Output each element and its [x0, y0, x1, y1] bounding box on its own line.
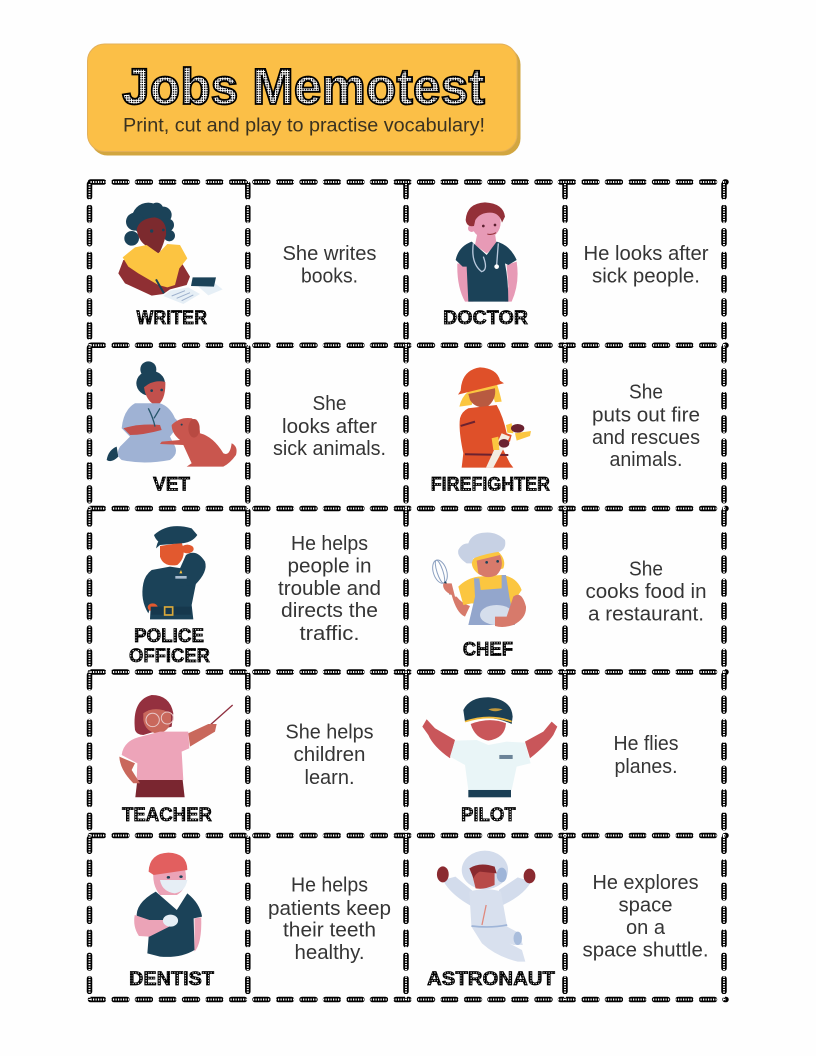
clue: dentist: healthy.: [294, 942, 364, 964]
clue: pilot: planes.: [614, 756, 678, 778]
clue: police officer: directs the: [281, 600, 378, 622]
clue: chef: a restaurant.: [588, 604, 704, 626]
clue: police officer: trouble and: [278, 578, 381, 600]
icon: dentist: [134, 853, 202, 957]
card: firefighter: [431, 367, 550, 496]
label: POLICE OFFICER: OFFICER: [129, 646, 210, 667]
label: CHEF: CHEF: [463, 640, 513, 661]
icon: firefighter: [458, 367, 531, 468]
clue: dentist: [268, 875, 391, 964]
clue: firefighter: [592, 382, 700, 471]
clue: astronaut: space shuttle.: [582, 940, 708, 962]
subtitle: Print, cut and play to practise vocabulary!: [123, 116, 485, 136]
dashed cut lines: [90, 182, 726, 1000]
clue: police officer: He helps: [291, 533, 368, 555]
card: teacher: [119, 695, 233, 826]
clue: pilot: [614, 733, 678, 778]
clue: writer: She writes: [282, 243, 376, 265]
icon: police officer: [142, 526, 206, 619]
card: astronaut: [427, 851, 555, 990]
clue: firefighter: animals.: [610, 449, 682, 471]
clue: teacher: She helps: [286, 722, 374, 744]
icon: chef: [430, 533, 526, 627]
clue: doctor: He looks after: [584, 243, 709, 265]
label: DENTIST: DENTIST: [129, 969, 214, 990]
card: vet: [107, 361, 237, 496]
clue: police officer: people in: [288, 556, 372, 578]
clue: writer: [282, 243, 376, 288]
clue: dentist: He helps: [291, 875, 368, 897]
label: DOCTOR: DOCTOR: [443, 308, 528, 329]
clue: dentist: patients keep: [268, 898, 391, 920]
label: POLICE OFFICER: [129, 626, 210, 667]
label: FIREFIGHTER: FIREFIGHTER: [431, 475, 550, 496]
title: Jobs Memotest: [122, 58, 485, 115]
clue: astronaut: He explores: [592, 872, 698, 894]
icon: writer: [118, 203, 223, 304]
title banner: [88, 44, 520, 156]
clue: vet: sick animals.: [273, 438, 386, 460]
clue: teacher: learn.: [304, 767, 354, 789]
icon: vet: [107, 361, 237, 467]
label: ASTRONAUT: ASTRONAUT: [427, 969, 555, 990]
clue: teacher: [286, 722, 374, 789]
clue: police officer: traffic.: [300, 623, 360, 645]
label: VET: VET: [153, 475, 190, 496]
clue: pilot: He flies: [614, 733, 678, 755]
card: doctor: [443, 202, 528, 329]
clue: doctor: [584, 243, 709, 288]
icon: teacher: [119, 695, 233, 797]
clue: writer: books.: [301, 266, 358, 288]
clue: chef: cooks food in: [586, 581, 706, 603]
icon: doctor: [456, 202, 518, 302]
clue: astronaut: [582, 872, 708, 962]
label: POLICE OFFICER: POLICE: [134, 626, 204, 647]
clue: astronaut: space: [618, 895, 672, 917]
clue: firefighter: She: [629, 382, 663, 404]
card: pilot: [422, 697, 557, 826]
card: writer: [118, 203, 223, 329]
clue: vet: looks after: [282, 416, 377, 438]
clue: police officer: [278, 533, 381, 645]
card: dentist: [129, 853, 214, 990]
banner face: [88, 44, 517, 152]
card: police officer: [129, 526, 210, 667]
clue: dentist: their teeth: [283, 920, 376, 942]
clue: vet: [273, 393, 386, 460]
clue: doctor: sick people.: [592, 266, 700, 288]
clue: chef: [586, 559, 706, 626]
clue: teacher: children: [294, 744, 366, 766]
clue: vet: She: [312, 393, 346, 415]
icon: pilot: [422, 697, 557, 797]
clue: chef: She: [629, 559, 663, 581]
clue: firefighter: and rescues: [592, 427, 700, 449]
label: PILOT: PILOT: [461, 805, 516, 826]
clue: firefighter: puts out fire: [592, 405, 700, 427]
clue: astronaut: on a: [626, 917, 666, 939]
label: WRITER: WRITER: [136, 308, 207, 329]
icon: astronaut: [437, 851, 535, 962]
banner shadow: [90, 48, 520, 156]
label: TEACHER: TEACHER: [122, 805, 212, 826]
card: chef: [430, 533, 526, 661]
